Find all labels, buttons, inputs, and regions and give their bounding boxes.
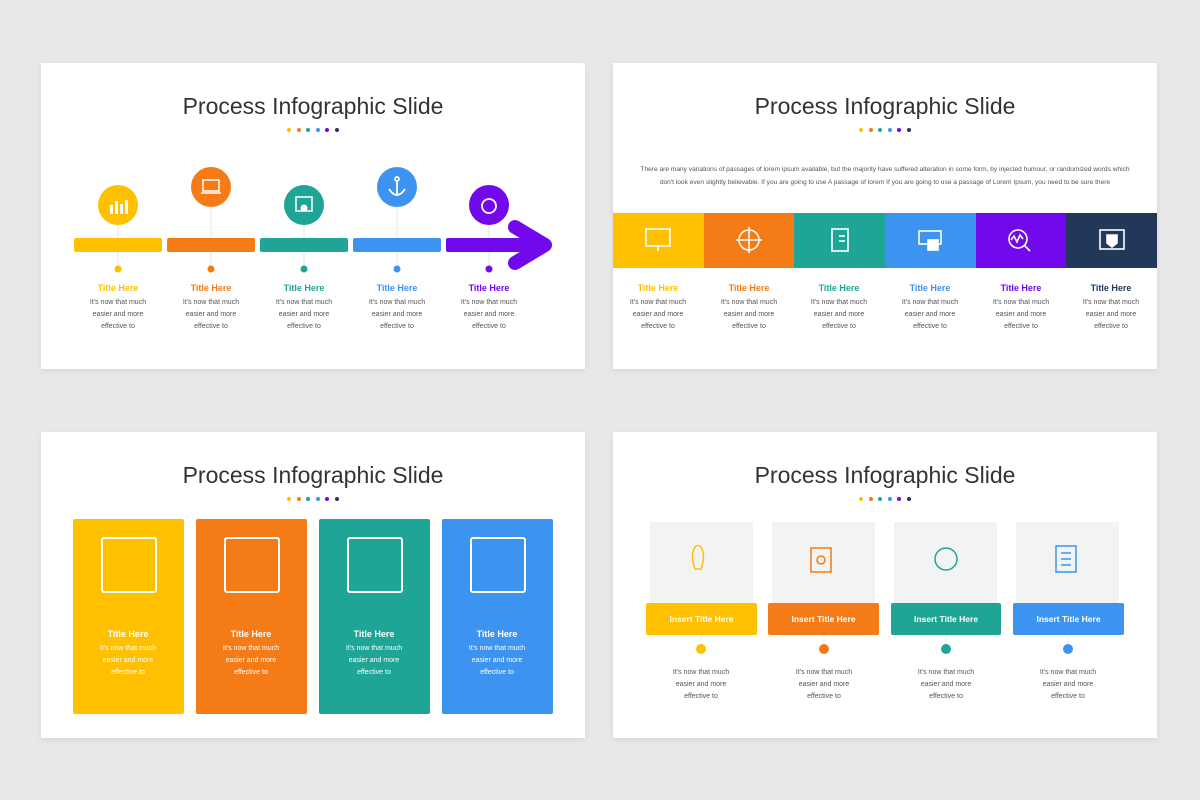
card 1: It's now that much — [100, 645, 156, 652]
step texts: It's now that much — [90, 299, 146, 306]
item texts: effective to — [1094, 323, 1128, 330]
item texts: effective to — [1004, 323, 1038, 330]
step texts: It's now that much — [369, 299, 425, 306]
item texts: effective to — [732, 323, 766, 330]
item texts: easier and more — [814, 311, 864, 318]
card 2: easier and more — [226, 657, 276, 664]
item texts: easier and more — [905, 311, 955, 318]
gray boxes — [650, 522, 753, 604]
dots and text: easier and more — [921, 681, 971, 688]
item texts: It's now that much — [1083, 299, 1139, 306]
item texts: It's now that much — [811, 299, 867, 306]
item texts: Title Here — [638, 283, 678, 293]
icons — [692, 544, 1077, 573]
panel: boxes with labels: Insert Title Here — [791, 614, 856, 624]
item texts: easier and more — [996, 311, 1046, 318]
heading: Process Infographic Slide — [755, 462, 1015, 488]
item texts: It's now that much — [630, 299, 686, 306]
step texts: It's now that much — [276, 299, 332, 306]
item texts: Title Here — [729, 283, 769, 293]
dots and text: effective to — [929, 693, 963, 700]
dots and text: easier and more — [799, 681, 849, 688]
step texts: effective to — [380, 323, 414, 330]
item texts: easier and more — [724, 311, 774, 318]
heading: Process Infographic Slide — [755, 93, 1015, 119]
card 3: Title Here — [354, 629, 394, 639]
label bars — [646, 603, 757, 635]
item texts: It's now that much — [902, 299, 958, 306]
item texts: Title Here — [1001, 283, 1041, 293]
color dots — [287, 497, 339, 501]
step texts: Title Here — [377, 283, 417, 293]
item texts: effective to — [641, 323, 675, 330]
dots and text: easier and more — [676, 681, 726, 688]
step texts: effective to — [472, 323, 506, 330]
dots and text: It's now that much — [918, 669, 974, 676]
heading: Process Infographic Slide — [183, 93, 443, 119]
panel: color strip — [613, 63, 1157, 369]
card 1: effective to — [111, 669, 145, 676]
item texts: Title Here — [910, 283, 950, 293]
step texts: effective to — [194, 323, 228, 330]
item texts: easier and more — [633, 311, 683, 318]
step texts: It's now that much — [183, 299, 239, 306]
icon: anchor — [377, 167, 417, 207]
card 4: effective to — [480, 669, 514, 676]
step texts: easier and more — [372, 311, 422, 318]
item texts: effective to — [913, 323, 947, 330]
step texts: easier and more — [464, 311, 514, 318]
color dots — [287, 128, 339, 132]
item texts: Title Here — [1091, 283, 1131, 293]
label bars: Insert Title Here — [669, 614, 734, 624]
card 1 — [73, 519, 184, 714]
icon strip — [613, 213, 1157, 268]
item texts: easier and more — [1086, 311, 1136, 318]
card 3: effective to — [357, 669, 391, 676]
card 2: effective to — [234, 669, 268, 676]
panel: boxes with labels: Insert Title Here — [1036, 614, 1101, 624]
item texts: Title Here — [819, 283, 859, 293]
step texts: effective to — [101, 323, 135, 330]
card 3: easier and more — [349, 657, 399, 664]
item texts: It's now that much — [721, 299, 777, 306]
step texts — [90, 283, 517, 330]
card 4 — [442, 519, 553, 714]
dots and text: It's now that much — [796, 669, 852, 676]
dots and text: It's now that much — [1040, 669, 1096, 676]
color dots — [859, 497, 911, 501]
card 4: It's now that much — [469, 645, 525, 652]
icon: settings window — [284, 185, 324, 225]
step texts: easier and more — [279, 311, 329, 318]
dots and text: effective to — [684, 693, 718, 700]
card 1: Title Here — [108, 629, 148, 639]
step texts: easier and more — [186, 311, 236, 318]
panel: boxes with labels — [613, 432, 1157, 738]
dots and text: easier and more — [1043, 681, 1093, 688]
item texts — [630, 283, 1139, 330]
card 4: easier and more — [472, 657, 522, 664]
step texts: Title Here — [191, 283, 231, 293]
dots and text — [673, 635, 1096, 700]
card 4: Title Here — [477, 629, 517, 639]
icon: chart — [98, 185, 138, 225]
step texts: It's now that much — [461, 299, 517, 306]
panel: timeline arrow — [41, 63, 585, 369]
dots and text: effective to — [807, 693, 841, 700]
dots and text: It's now that much — [673, 669, 729, 676]
card 2 — [196, 519, 307, 714]
connectors — [74, 207, 552, 272]
item texts: It's now that much — [993, 299, 1049, 306]
item texts: effective to — [822, 323, 856, 330]
step texts: Title Here — [284, 283, 324, 293]
card 2: Title Here — [231, 629, 271, 639]
card 2: It's now that much — [223, 645, 279, 652]
heading: Process Infographic Slide — [183, 462, 443, 488]
panel: boxes with labels: Insert Title Here — [914, 614, 978, 624]
card 3 — [319, 519, 430, 714]
step texts: easier and more — [93, 311, 143, 318]
intro paragraph: There are many variations of passages of lorem ipsum available, but the majority have suffered alteration in some form, by injected humour, or randomized words which don't look even slightly believable. If you are going to use A passage of lorem If you are going to use a passage of Lorem Ipsum, you need to be sure there — [640, 166, 1130, 186]
color dots — [859, 128, 911, 132]
dots and text: effective to — [1051, 693, 1085, 700]
icon: alarm clock — [469, 185, 509, 225]
step texts: Title Here — [98, 283, 138, 293]
step texts: effective to — [287, 323, 321, 330]
card 3: It's now that much — [346, 645, 402, 652]
icon: code — [191, 167, 231, 207]
card 1: easier and more — [103, 657, 153, 664]
step texts: Title Here — [469, 283, 509, 293]
panel: cards — [41, 432, 585, 738]
